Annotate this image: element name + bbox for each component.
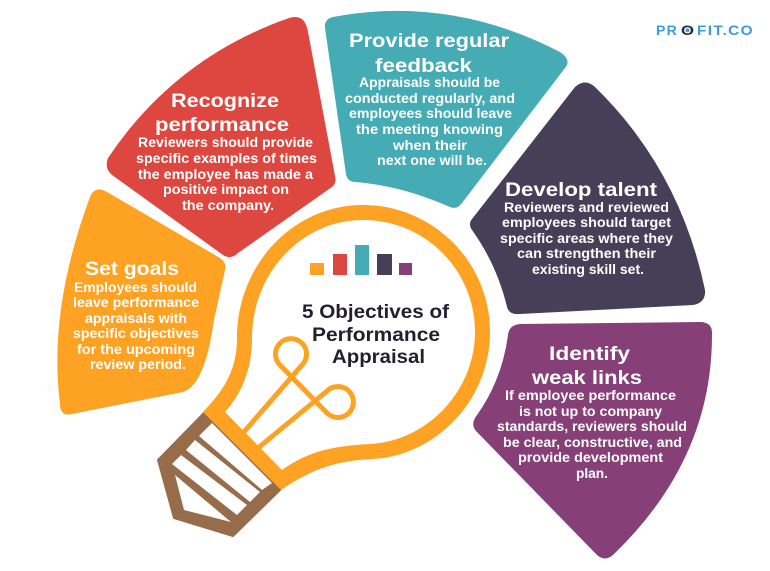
title: 5 Objectives of — [302, 301, 450, 323]
panel: develop talent — [470, 82, 705, 314]
panel: set goals: Employees should — [74, 280, 197, 295]
panel: provide regular feedback: employees should leave — [349, 106, 513, 121]
logo: FIT.CO — [697, 23, 754, 38]
panel: recognize performance: Recognize — [171, 90, 279, 112]
panel: identify weak links: If employee performance — [505, 388, 677, 403]
panel: develop talent: specific areas where they — [500, 231, 674, 246]
panel: provide regular feedback: when their — [392, 138, 468, 153]
panel: develop talent: can strengthen their — [517, 246, 657, 261]
title: Performance — [312, 324, 440, 346]
panel: identify weak links: is not up to company — [519, 404, 663, 419]
panel: set goals: Set goals — [85, 258, 179, 280]
logo: PR — [656, 23, 678, 38]
panel: identify weak links — [473, 322, 712, 558]
panel: set goals: appraisals with — [85, 311, 187, 326]
panel: set goals: for the upcoming — [77, 342, 195, 357]
panel: develop talent: existing skill set. — [532, 262, 644, 277]
panel: identify weak links: Identify — [549, 343, 630, 365]
panel: recognize performance: the company. — [182, 198, 274, 213]
panel: provide regular feedback: conducted regularly, and — [345, 91, 515, 106]
panel: identify weak links: be clear, constructive, and — [503, 435, 682, 450]
panel: recognize performance: Reviewers should provide — [138, 135, 314, 150]
icon: light bulb — [158, 205, 490, 536]
logo — [656, 23, 754, 38]
panel: recognize performance: the employee has made a — [138, 167, 314, 182]
panel: recognize performance: specific examples of times — [136, 151, 317, 166]
panel: provide regular feedback: the meeting knowing — [356, 122, 503, 137]
panel: provide regular feedback: Appraisals should be — [359, 75, 501, 90]
panel: develop talent: Develop talent — [505, 179, 658, 201]
panel: identify weak links: plan. — [576, 466, 608, 481]
panel: recognize performance: positive impact on — [163, 182, 289, 197]
logo: O — [681, 23, 694, 38]
panel: identify weak links: standards, reviewers should — [497, 419, 687, 434]
panel: recognize performance — [107, 17, 336, 257]
panel: recognize performance: performance — [155, 114, 289, 136]
panel: provide regular feedback: Provide regular — [349, 30, 509, 52]
bar chart icon — [310, 245, 412, 275]
panel: set goals: review period. — [90, 357, 186, 372]
title: Appraisal — [332, 346, 425, 368]
panel: identify weak links: provide development — [518, 450, 664, 465]
panel: provide regular feedback: feedback — [375, 55, 472, 77]
panel: set goals: specific objectives — [73, 326, 199, 341]
panel: set goals — [57, 189, 225, 415]
panel: develop talent: Reviewers and reviewed — [504, 200, 669, 215]
panel: develop talent: employees should target — [502, 215, 672, 230]
panel: set goals: leave performance — [73, 295, 200, 310]
title — [302, 301, 450, 368]
panel: identify weak links: weak links — [531, 367, 642, 389]
panel: provide regular feedback: next one will be. — [377, 153, 487, 168]
panel: provide regular feedback — [325, 11, 568, 208]
